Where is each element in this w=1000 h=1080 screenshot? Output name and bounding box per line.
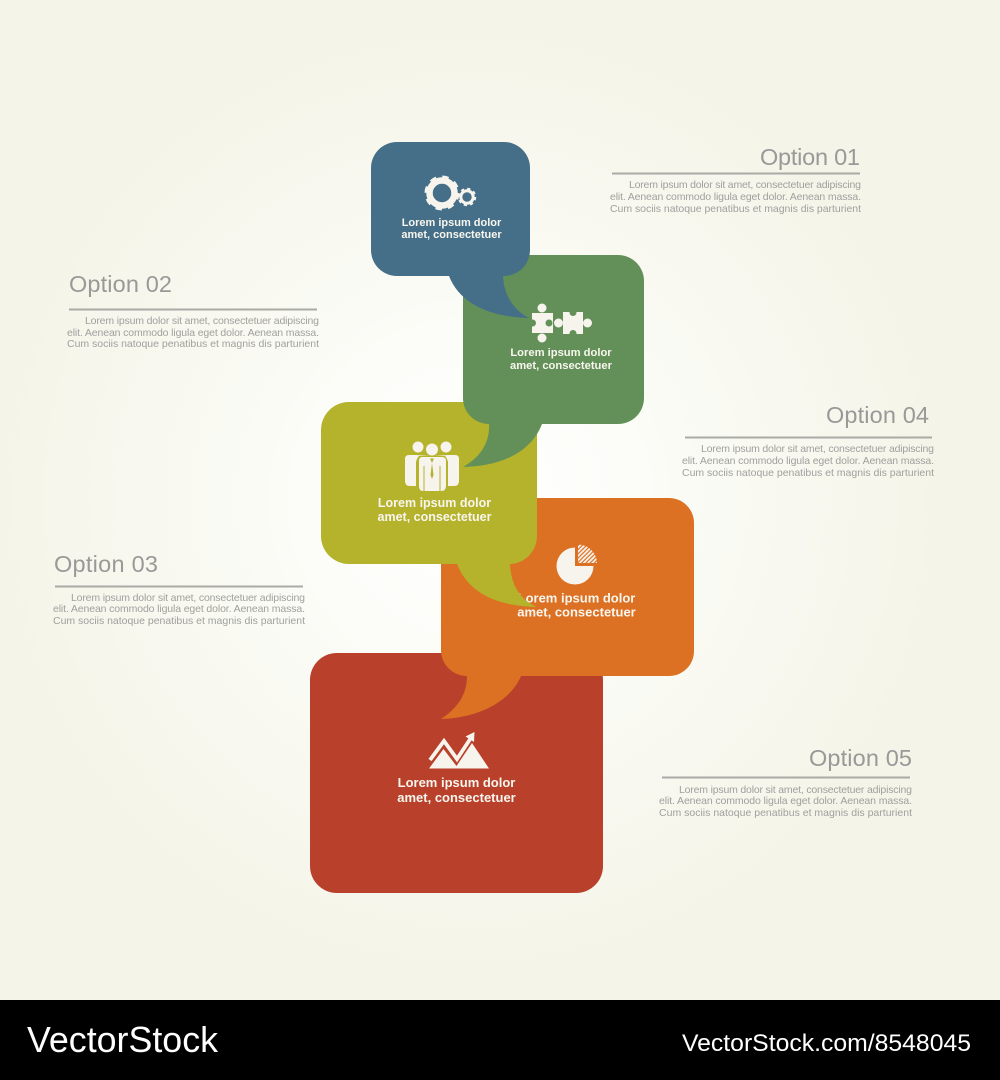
text block: option 01: Cum sociis natoque penatibus et magnis dis parturient [610, 203, 861, 215]
text block: option 01: Lorem ipsum dolor sit amet, consectetuer adipiscing [629, 179, 861, 191]
text block: option 03: Option 03 [54, 551, 158, 577]
text block: option 02: Lorem ipsum dolor sit amet, consectetuer adipiscing [85, 315, 319, 327]
icon: puzzle pieces [529, 304, 592, 342]
footer logo text: VectorStock [27, 1019, 219, 1060]
text block: option 04: Cum sociis natoque penatibus et magnis dis parturient [682, 467, 934, 479]
icon: business team [405, 442, 459, 491]
panel: green speech bubble [463, 255, 644, 467]
panel: orange speech bubble [441, 498, 694, 719]
text block: option 05: Lorem ipsum dolor sit amet, consectetuer adipiscing [679, 784, 912, 796]
text block: option 05: elit. Aenean commodo ligula eget dolor. Aenean massa. [659, 795, 912, 807]
caption: blue bubble: amet, consectetuer [401, 229, 502, 241]
caption: green bubble: amet, consectetuer [510, 360, 613, 372]
text block: option 01: elit. Aenean commodo ligula eget dolor. Aenean massa. [610, 191, 861, 203]
caption: red bubble: amet, consectetuer [397, 790, 516, 805]
panel: blue speech bubble [371, 142, 530, 318]
text block: option 03 [53, 551, 305, 627]
text block: option 05: Cum sociis natoque penatibus et magnis dis parturient [659, 807, 912, 819]
caption: olive bubble: amet, consectetuer [378, 510, 492, 524]
caption: green bubble: Lorem ipsum dolor [510, 347, 612, 359]
caption: orange bubble: Lorem ipsum dolor [518, 590, 635, 606]
text block: option 05 [659, 745, 912, 819]
footer url text: VectorStock.com/8548045 [682, 1030, 971, 1057]
text block: option 04: Lorem ipsum dolor sit amet, consectetuer adipiscing [701, 443, 934, 455]
text block: option 03: Lorem ipsum dolor sit amet, consectetuer adipiscing [71, 592, 305, 604]
text block: option 02: Cum sociis natoque penatibus et magnis dis parturient [67, 338, 319, 350]
text block: option 04: Option 04 [826, 402, 929, 428]
caption: orange bubble: amet, consectetuer [517, 604, 636, 620]
text block: option 02 [67, 271, 319, 350]
text block: option 02: elit. Aenean commodo ligula eget dolor. Aenean massa. [67, 327, 319, 339]
text block: option 04 [682, 402, 934, 479]
panel: red speech bubble [310, 653, 603, 893]
caption: blue bubble: Lorem ipsum dolor [402, 217, 501, 229]
text block: option 01: Option 01 [760, 144, 860, 170]
footer bar [0, 1000, 1000, 1080]
caption: red bubble: Lorem ipsum dolor [398, 775, 515, 790]
icon: pie chart [556, 544, 597, 584]
text block: option 04: elit. Aenean commodo ligula eget dolor. Aenean massa. [682, 455, 934, 467]
text block: option 03: elit. Aenean commodo ligula eget dolor. Aenean massa. [53, 603, 305, 615]
panel: olive speech bubble [321, 402, 537, 607]
text block: option 01 [610, 144, 861, 215]
icon: gears [426, 178, 475, 208]
caption: olive bubble: Lorem ipsum dolor [378, 496, 491, 510]
text block: option 05: Option 05 [809, 745, 912, 771]
text block: option 02: Option 02 [69, 271, 172, 297]
icon: mountain chart with arrow [429, 732, 489, 768]
text block: option 03: Cum sociis natoque penatibus et magnis dis parturient [53, 615, 305, 627]
